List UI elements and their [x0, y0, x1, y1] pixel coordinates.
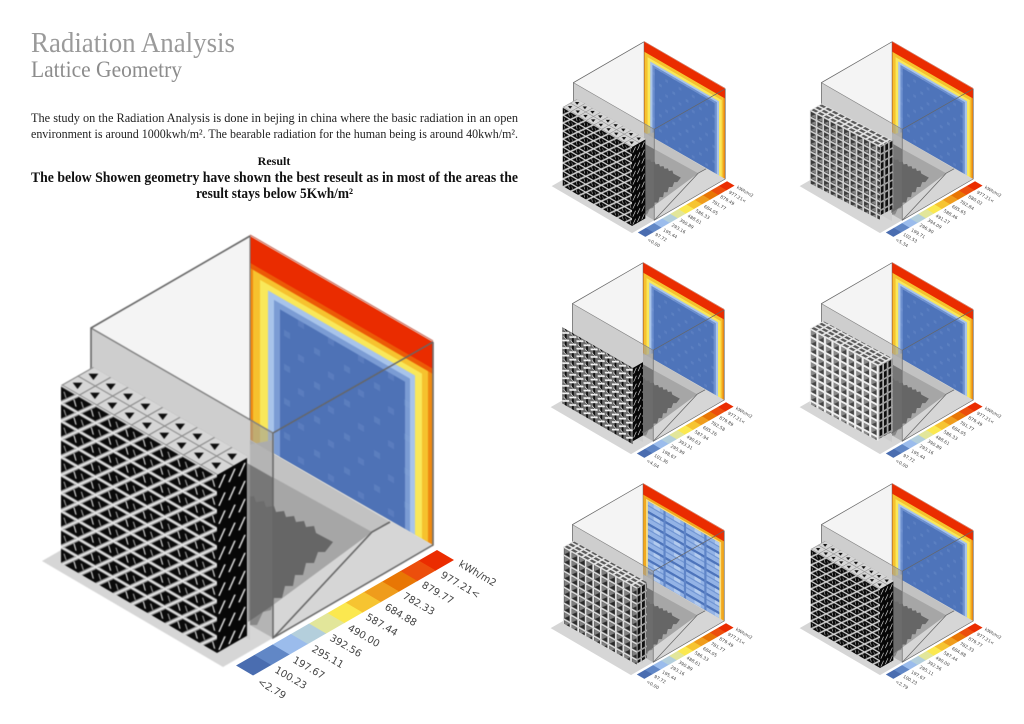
legend labels	[894, 406, 1002, 470]
legend labels: kWh/m2	[983, 185, 1002, 199]
legend labels: 880.02	[967, 194, 984, 207]
cube shell	[552, 41, 725, 233]
legend labels: 197.67	[290, 655, 326, 682]
small cube: bottom left	[551, 483, 753, 691]
legend labels: 390.89	[926, 439, 943, 452]
legend labels: 879.49	[719, 194, 736, 207]
legend labels: 293.16	[670, 223, 687, 236]
intro paragraph: The study on the Radiation Analysis is done in bejing in china where the basic radiation in an open	[31, 111, 518, 125]
legend labels	[645, 627, 753, 691]
heat map panel	[644, 42, 725, 179]
legend labels	[256, 559, 498, 702]
heat map panel	[643, 263, 724, 400]
legend labels: 684.05	[950, 425, 967, 438]
legend labels: <5.34	[894, 237, 909, 249]
legend labels: 587.44	[364, 612, 399, 639]
heat map panel	[250, 236, 433, 546]
legend labels: 390.89	[677, 660, 694, 673]
legend labels	[646, 185, 754, 249]
legend labels: 491.27	[934, 213, 951, 226]
legend labels: 782.33	[958, 641, 975, 654]
legend labels: <0.00	[894, 458, 909, 470]
intro paragraph	[31, 111, 518, 141]
small cube: top right	[800, 41, 1002, 249]
legend labels: 392.56	[926, 660, 943, 673]
legend labels: 781.77	[958, 420, 975, 433]
legend labels: 685.65	[950, 204, 967, 217]
legend labels: kWh/m2	[983, 627, 1002, 641]
legend labels	[894, 627, 1002, 691]
lattice geometry	[811, 541, 894, 668]
legend labels: 488.61	[685, 655, 702, 668]
legend labels: 97.72	[653, 674, 667, 686]
legend labels: 293.16	[669, 665, 686, 678]
legend labels: 977.21<	[727, 190, 747, 205]
legend labels: <2.79	[894, 679, 909, 691]
legend labels: 490.00	[934, 655, 951, 668]
small cube: middle left	[551, 262, 753, 470]
legend labels: 488.61	[686, 213, 703, 226]
title block	[31, 28, 235, 82]
legend labels: 293.16	[918, 444, 935, 457]
legend labels: 393.31	[677, 439, 694, 452]
colour legend band	[637, 623, 734, 679]
legend labels: 782.33	[400, 591, 436, 618]
legend labels: kWh/m2	[735, 185, 754, 199]
result statement: result stays below 5Kwh/m²	[196, 186, 353, 202]
legend labels: 392.56	[328, 633, 363, 660]
small cube: bottom right	[800, 483, 1002, 691]
legend labels: 195.44	[661, 669, 677, 682]
legend labels: 977.21<	[726, 411, 746, 426]
result statement	[31, 170, 518, 202]
legend labels: 879.89	[718, 415, 735, 428]
main cube: triangular lattice radiation analysis	[42, 235, 498, 702]
heat map panel	[892, 42, 973, 179]
legend labels: 684.05	[702, 204, 719, 217]
colour legend band	[886, 181, 983, 237]
legend labels: 490.00	[346, 623, 381, 650]
colour legend band	[886, 402, 983, 458]
legend labels: 102.53	[902, 232, 918, 245]
colour legend band	[236, 550, 454, 676]
legend labels: 588.46	[942, 208, 959, 221]
legend labels: <4.04	[645, 458, 660, 470]
legend labels: <0.00	[645, 679, 660, 691]
legend labels: 587.94	[693, 429, 710, 442]
cube shell	[800, 483, 973, 675]
legend labels: 685.26	[701, 425, 718, 438]
colour legend band	[637, 402, 734, 458]
legend labels: 295.99	[669, 444, 686, 457]
colour legend band	[886, 623, 983, 679]
legend labels: 587.44	[942, 650, 959, 663]
legend labels: 977.21<	[438, 570, 482, 601]
lattice geometry	[810, 321, 893, 441]
legend labels: 977.21<	[975, 632, 995, 647]
legend labels: 195.44	[910, 448, 926, 461]
legend labels	[894, 185, 1002, 249]
cube shell	[551, 262, 724, 454]
legend labels: 394.09	[926, 218, 943, 231]
legend labels: 101.36	[653, 453, 669, 466]
result statement: The below Showen geometry have shown the best reseult as in most of the areas the	[31, 170, 518, 186]
legend labels: 684.05	[701, 646, 718, 659]
cube shell with floor and shadow	[42, 235, 433, 667]
legend labels: 586.33	[694, 208, 711, 221]
title: Radiation Analysis: Radiation Analysis	[31, 28, 235, 59]
legend labels: kWh/m2	[983, 406, 1002, 420]
legend labels: 879.77	[967, 636, 984, 649]
legend labels: 195.44	[662, 227, 678, 240]
legend labels: 97.72	[654, 232, 668, 244]
small cube: middle right	[800, 262, 1002, 470]
legend labels: 295.11	[310, 644, 345, 671]
result heading: Result	[258, 154, 290, 168]
legend labels: <2.79	[256, 677, 288, 702]
legend labels: 296.90	[918, 223, 935, 236]
legend labels: 977.21<	[975, 411, 995, 426]
legend labels: kWh/m2	[734, 627, 753, 641]
legend labels: 295.11	[918, 665, 935, 678]
legend labels: <0.00	[646, 237, 661, 249]
cube shell	[800, 262, 973, 454]
intro paragraph: environment is around 1000kwh/m². The bearable radiation for the human being is around 40kwh/m².	[31, 127, 518, 141]
lattice geometry	[563, 99, 646, 226]
lattice geometry	[562, 327, 643, 444]
heat map panel	[892, 484, 973, 621]
legend labels: 782.84	[958, 199, 975, 212]
legend labels	[645, 406, 753, 470]
legend labels: 490.63	[685, 434, 702, 447]
legend labels: 879.77	[420, 580, 455, 607]
lattice geometry	[563, 541, 647, 664]
legend labels: 586.33	[693, 650, 710, 663]
subtitle: Lattice Geometry: Lattice Geometry	[31, 57, 182, 82]
legend labels: 586.33	[942, 429, 959, 442]
colour legend band	[638, 181, 735, 237]
legend labels: 684.88	[950, 646, 967, 659]
small cube: top left	[552, 41, 754, 249]
legend labels: 390.89	[678, 218, 695, 231]
heat map panel	[892, 263, 973, 400]
legend labels: kWh/m2	[456, 559, 498, 589]
heat map panel	[643, 484, 724, 621]
legend labels: 198.67	[661, 448, 677, 461]
legend labels: 977.21<	[975, 190, 995, 205]
legend labels: 100.23	[272, 665, 308, 692]
lattice geometry	[61, 367, 249, 653]
legend labels: 97.72	[902, 453, 916, 465]
legend labels: 199.71	[910, 227, 926, 240]
cube shell	[551, 483, 724, 675]
legend labels: 488.61	[934, 434, 951, 447]
legend labels: 879.49	[718, 636, 735, 649]
legend labels: kWh/m2	[734, 406, 753, 420]
cube shell	[800, 41, 973, 233]
legend labels: 197.67	[910, 669, 926, 682]
legend labels: 684.88	[382, 602, 418, 629]
legend labels: 782.58	[709, 420, 726, 433]
legend labels: 977.21<	[726, 632, 746, 647]
legend labels: 100.23	[902, 674, 918, 687]
legend labels: 781.77	[710, 199, 727, 212]
lattice geometry	[810, 104, 893, 220]
legend labels: 781.77	[709, 641, 726, 654]
legend labels: 879.49	[967, 415, 984, 428]
